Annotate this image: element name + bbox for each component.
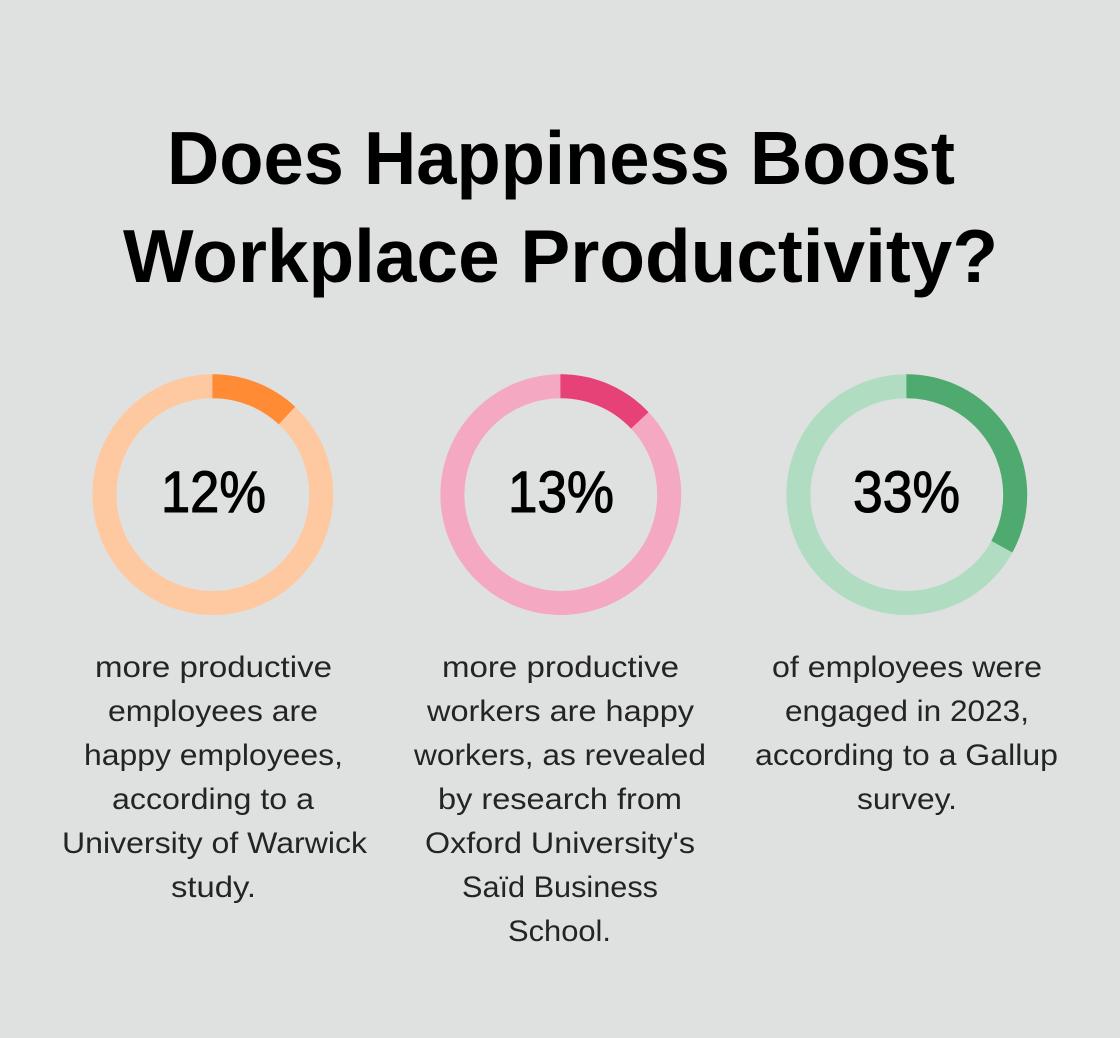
value: 13%: 13% — [508, 460, 614, 525]
description: 33% — [755, 651, 1058, 816]
title — [123, 116, 998, 298]
description: 12%: happy employees, — [84, 739, 343, 772]
description: 13%: Oxford University's — [425, 827, 695, 860]
value: 33%: 33% — [853, 460, 960, 525]
description: 13%: workers are happy — [426, 695, 694, 728]
description: 13%: School. — [508, 915, 611, 948]
description: 12%: employees are — [108, 695, 318, 728]
donut chart: 33% — [798, 386, 1015, 603]
title: Does Happiness Boost — [167, 116, 955, 200]
description: 13%: more productive — [442, 651, 679, 684]
description: 13% — [413, 651, 706, 948]
description: 12%: according to a — [112, 783, 314, 816]
description: 12% — [62, 651, 368, 904]
value: 12%: 12% — [161, 460, 266, 525]
description: 12%: University of Warwick — [62, 827, 368, 860]
panel: 13 percent stat — [413, 386, 706, 948]
description: 13%: Saïd Business — [462, 871, 658, 904]
panel: 12 percent stat — [62, 386, 368, 904]
description: 13%: workers, as revealed — [413, 739, 706, 772]
panel: 33 percent stat — [755, 386, 1058, 816]
description: 12%: study. — [171, 871, 256, 904]
description: 33%: of employees were — [772, 651, 1042, 684]
description: 13%: by research from — [438, 783, 682, 816]
title: Workplace Productivity? — [123, 214, 998, 298]
donut chart: 12% — [104, 386, 321, 603]
description: 33%: survey. — [857, 783, 957, 816]
description: 33%: according to a Gallup — [755, 739, 1058, 772]
donut chart: 13% — [452, 386, 669, 603]
description: 33%: engaged in 2023, — [785, 695, 1029, 728]
description: 12%: more productive — [95, 651, 332, 684]
